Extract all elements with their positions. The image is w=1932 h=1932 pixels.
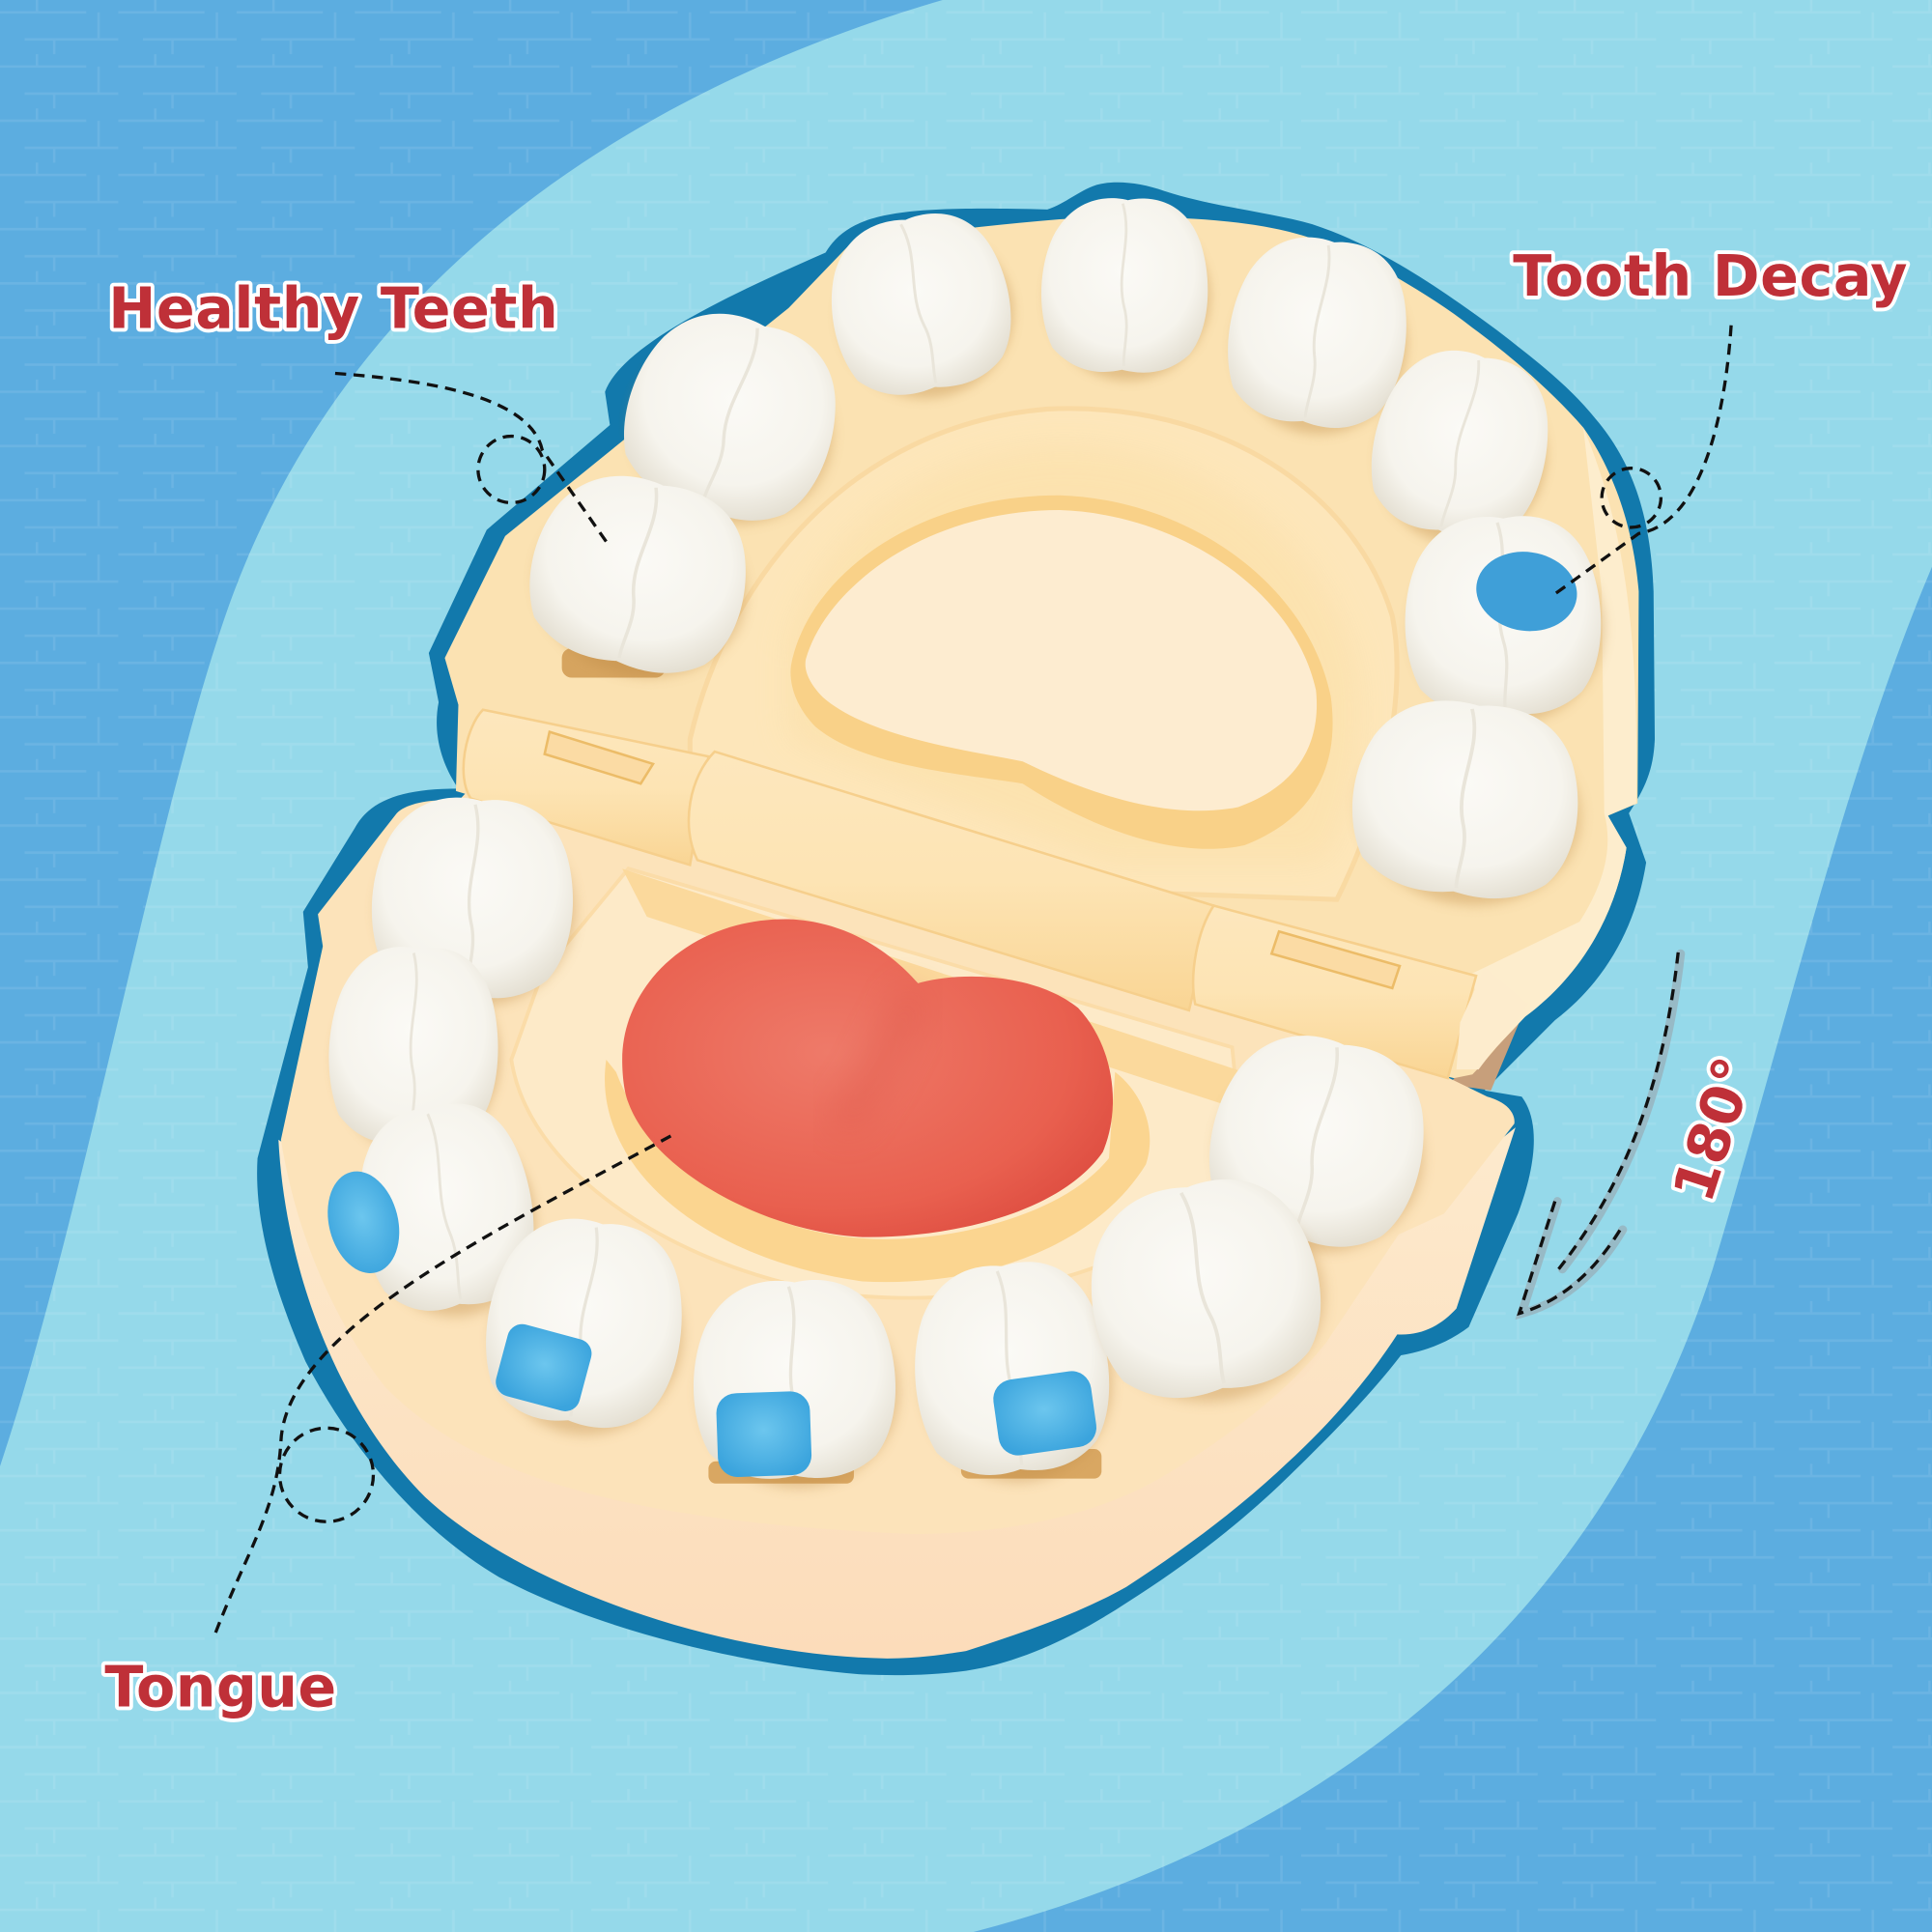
tooth 16 <box>1188 1015 1449 1275</box>
tooth 8 <box>1340 688 1594 920</box>
tooth 9 <box>363 790 584 1014</box>
tooth 14 socket <box>961 1449 1101 1479</box>
tooth 1 socket <box>562 648 666 678</box>
hinge: left barrel <box>464 710 708 865</box>
hinge <box>464 710 1528 1078</box>
upper tray: palate basin <box>790 496 1333 849</box>
tooth 15 <box>1074 1165 1340 1421</box>
lower tray: inner recess <box>511 868 1244 1298</box>
case: lower tray surface <box>281 764 1515 1534</box>
tooth 14 <box>906 1255 1121 1491</box>
tooth 3 <box>817 202 1027 413</box>
hinge: right slot <box>1271 931 1400 988</box>
hinge: left slot <box>545 732 653 783</box>
leader: Tooth Decay <box>1555 326 1731 594</box>
brace 4 <box>991 1369 1099 1458</box>
tooth 4 <box>1038 195 1213 384</box>
brace 2 <box>493 1321 595 1414</box>
leader: Tongue <box>215 1133 675 1633</box>
upper tray: palate surface <box>806 510 1317 810</box>
tooth 12 <box>470 1205 701 1450</box>
gap under hinge <box>1448 1016 1521 1091</box>
label: 180 degrees: 180° <box>1661 1049 1769 1209</box>
tooth 13 socket <box>708 1462 854 1484</box>
tooth 11 <box>347 1094 549 1328</box>
leader: Healthy Teeth <box>335 373 608 543</box>
hinge: right barrel <box>1193 906 1476 1078</box>
case: lower tray wall <box>278 1127 1516 1659</box>
tooth 5 <box>1214 225 1424 448</box>
rotation arrow <box>1520 952 1681 1314</box>
upper tray: inner arch <box>690 409 1397 899</box>
lower tray: back wall <box>622 868 1282 1115</box>
label: Healthy Teeth: Healthy Teeth <box>108 275 558 341</box>
hinge: tab <box>1457 967 1528 1069</box>
tooth 6 <box>1352 333 1570 563</box>
dental model case <box>257 183 1655 1675</box>
tooth 10 <box>324 943 506 1157</box>
tooth 7 <box>1406 516 1604 724</box>
brace 3 <box>716 1391 812 1478</box>
tooth 1 <box>510 456 770 700</box>
tooth 13 <box>694 1280 898 1488</box>
brace 1 <box>318 1164 410 1281</box>
decay spot on upper tooth <box>1471 546 1582 638</box>
upper tray: right rim <box>1472 428 1636 1060</box>
tongue: central groove <box>838 992 918 1127</box>
case: blue outline <box>257 183 1655 1675</box>
hinge: centre barrel <box>689 752 1213 1010</box>
upper tray: arch glow <box>788 446 1359 863</box>
label: Tongue: Tongue <box>104 1655 336 1720</box>
lower tray: tongue rim <box>605 1060 1150 1282</box>
tooth 2 <box>599 289 865 552</box>
case: upper tray <box>444 217 1638 1078</box>
label: Tooth Decay: Tooth Decay <box>1513 243 1907 309</box>
tongue <box>622 920 1113 1237</box>
